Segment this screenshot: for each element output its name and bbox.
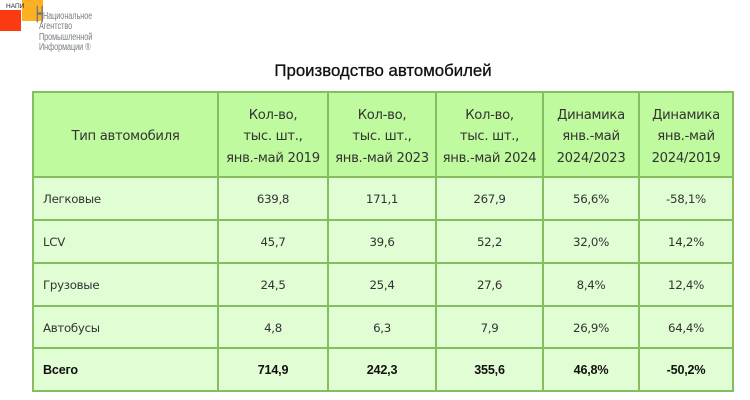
row: passenger cars: 171,1 bbox=[366, 192, 398, 206]
logo: agency name: Информации ® bbox=[39, 42, 91, 53]
production table bbox=[32, 91, 734, 392]
logo bbox=[0, 0, 92, 53]
row: total bbox=[34, 349, 732, 390]
row: total: 714,9 bbox=[258, 363, 288, 377]
table header row bbox=[34, 93, 732, 390]
table header row: янв.-май 2023 bbox=[335, 151, 429, 166]
row: LCV: 52,2 bbox=[477, 235, 502, 249]
row: trucks: 12,4% bbox=[668, 278, 704, 292]
row: passenger cars bbox=[34, 178, 732, 219]
table header row: Динамика bbox=[557, 108, 625, 123]
logo: big initial: Н bbox=[36, 1, 43, 27]
row: LCV: 39,6 bbox=[369, 235, 395, 249]
table header row: янв.-май bbox=[562, 129, 620, 144]
row: total: 242,3 bbox=[367, 363, 397, 377]
row: LCV bbox=[34, 221, 732, 262]
logo: red square bbox=[0, 10, 21, 31]
table header row: тыс. шт., bbox=[243, 129, 303, 144]
row: passenger cars: -58,1% bbox=[666, 192, 706, 206]
row: buses: 4,8 bbox=[264, 320, 282, 334]
table header row: Тип автомобиля bbox=[72, 129, 179, 144]
row: passenger cars: 267,9 bbox=[473, 192, 506, 206]
logo: orange square bbox=[22, 0, 43, 21]
row: buses bbox=[34, 307, 732, 347]
logo: agency name bbox=[39, 11, 92, 53]
row: trucks: 25,4 bbox=[369, 278, 395, 292]
row: trucks: 27,6 bbox=[477, 278, 502, 292]
row: total: Всего bbox=[43, 363, 78, 377]
table header row: 2024/2019 bbox=[652, 151, 720, 166]
row: buses: Автобусы bbox=[43, 320, 100, 334]
row: buses: 26,9% bbox=[573, 320, 609, 334]
logo: agency name: Промышленной bbox=[39, 32, 92, 43]
table header row: янв.-май 2024 bbox=[443, 151, 536, 166]
row: total: -50,2% bbox=[667, 363, 705, 377]
row: total: 46,8% bbox=[574, 363, 608, 377]
table header row: 2024/2023 bbox=[557, 151, 625, 166]
row: LCV: 45,7 bbox=[260, 235, 286, 249]
row: trucks: 24,5 bbox=[260, 278, 286, 292]
row: passenger cars: Легковые bbox=[43, 192, 101, 206]
table header row: янв.-май 2019 bbox=[226, 151, 320, 166]
row: LCV: 14,2% bbox=[668, 235, 704, 249]
logo: small caption: НАПИ bbox=[6, 3, 24, 10]
table header row: тыс. шт., bbox=[460, 129, 519, 144]
row: LCV: LCV bbox=[43, 235, 65, 249]
row: buses: 6,3 bbox=[373, 320, 391, 334]
table header row: Кол-во, bbox=[465, 108, 514, 123]
row: trucks: 8,4% bbox=[577, 278, 605, 292]
row: passenger cars: 639,8 bbox=[257, 192, 289, 206]
row: buses: 7,9 bbox=[481, 320, 498, 334]
logo: agency name: Агентство bbox=[39, 21, 72, 32]
title: Производство автомобилей bbox=[274, 61, 492, 80]
row: buses: 64,4% bbox=[668, 320, 704, 334]
table header row: янв.-май bbox=[657, 129, 715, 144]
table header row: Динамика bbox=[652, 108, 720, 123]
row: passenger cars: 56,6% bbox=[573, 192, 609, 206]
row: LCV: 32,0% bbox=[573, 235, 609, 249]
table header row: Кол-во, bbox=[249, 108, 297, 123]
table header row: Кол-во, bbox=[358, 108, 406, 123]
row: trucks bbox=[34, 264, 732, 305]
row: trucks: Грузовые bbox=[43, 278, 99, 292]
logo: agency name: Национальное bbox=[43, 11, 92, 22]
row: total: 355,6 bbox=[474, 363, 505, 377]
table header row: тыс. шт., bbox=[352, 129, 412, 144]
